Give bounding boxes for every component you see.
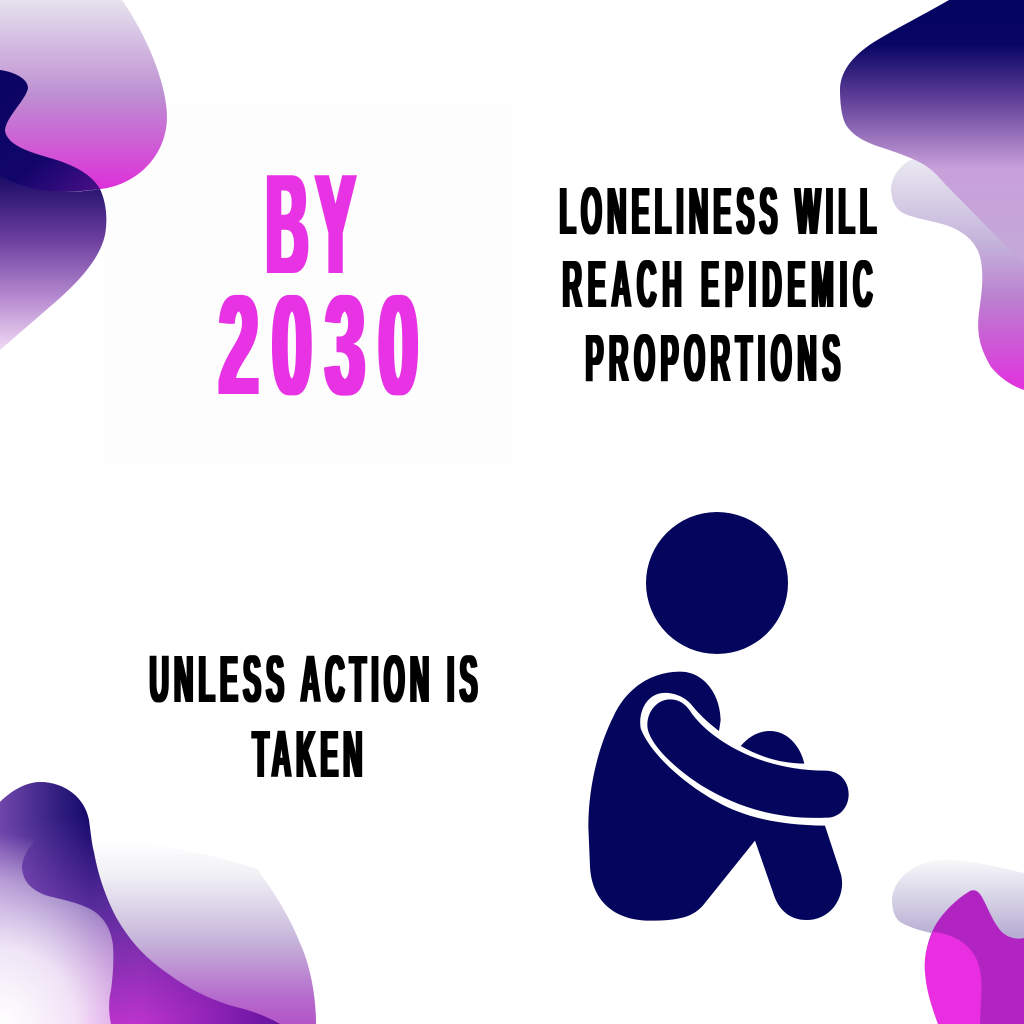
heading: BY 2030 (219, 145, 418, 424)
text: loneliness statement: REACH EPIDEMIC (562, 247, 873, 321)
decorative blob: bottom left (0, 782, 316, 1024)
text: unless action is taken (150, 642, 478, 791)
heading: BY 2030: 2030 (219, 265, 418, 424)
text: unless action is taken: UNLESS ACTION IS (150, 642, 478, 716)
decorative blob: top right (840, 0, 1024, 390)
text: loneliness statement (560, 174, 876, 395)
text: unless action is taken: TAKEN (252, 717, 363, 791)
background panel behind heading (105, 105, 512, 465)
text: loneliness statement: PROPORTIONS (586, 321, 840, 395)
heading: BY 2030: BY (266, 145, 355, 303)
decorative blob: bottom right (892, 860, 1024, 1024)
decorative blob: top left (0, 0, 167, 350)
icon: lonely seated person (588, 512, 849, 921)
text: loneliness statement: LONELINESS WILL (560, 174, 876, 248)
